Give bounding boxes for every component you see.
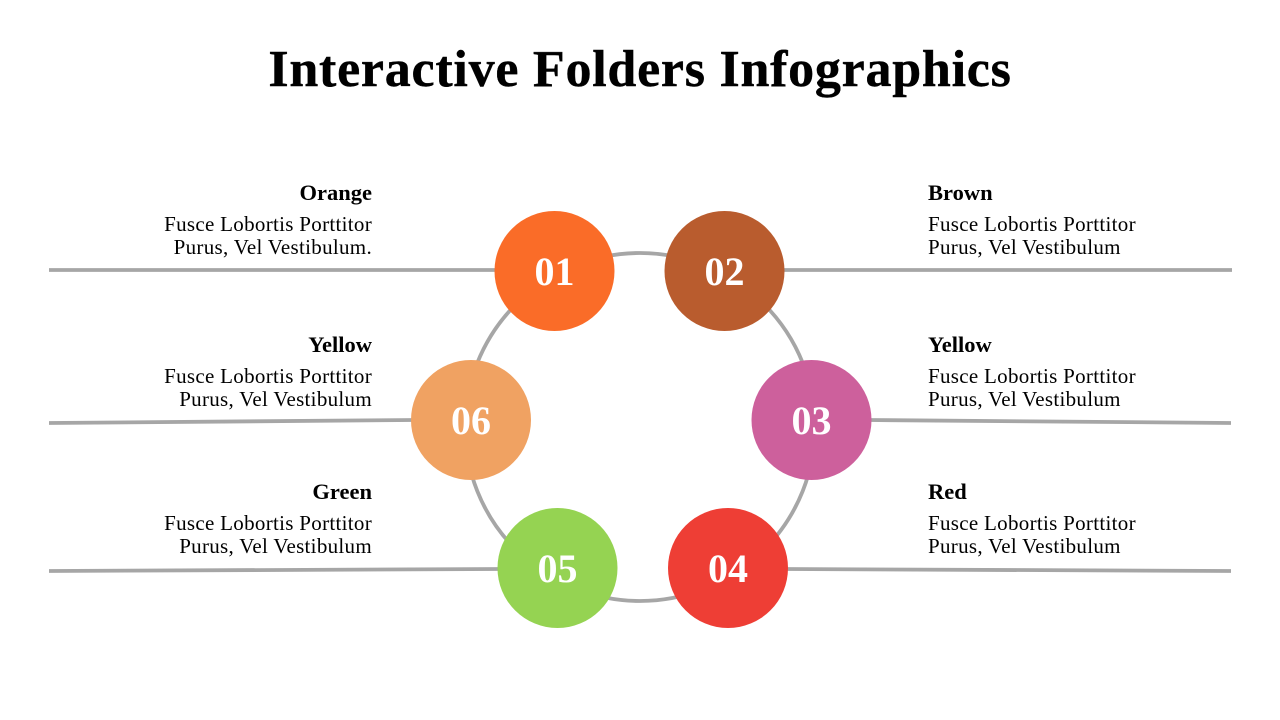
text block: Green: Purus, Vel Vestibulum [179,534,372,558]
text block: Yellow left: Fusce Lobortis Porttitor [164,364,372,388]
text block: Brown [928,180,1136,259]
central ring [465,253,815,601]
text block: Green: Fusce Lobortis Porttitor [164,511,372,535]
text block: Red: Red [928,478,967,504]
text block: Yellow right: Fusce Lobortis Porttitor [928,364,1136,388]
text block: Orange: Purus, Vel Vestibulum. [174,235,372,259]
text block: Red: Fusce Lobortis Porttitor [928,511,1136,535]
circle 03: 03 [792,398,832,443]
text block: Orange [164,180,372,259]
text block: Brown: Fusce Lobortis Porttitor [928,212,1136,236]
text block: Brown: Brown [928,180,993,204]
text block: Orange: Orange [300,180,372,204]
connector lines [49,270,1232,571]
text block: Red [928,478,1136,558]
text block: Yellow right [928,332,1136,411]
circle 01 [494,211,614,331]
circle 01: 01 [534,249,574,294]
circle 04 [668,508,788,628]
text block: Yellow left: Purus, Vel Vestibulum [179,387,372,411]
text block: Green: Green [312,478,372,504]
circle 06: 06 [451,398,491,443]
circle 02 [664,211,784,331]
circle 03 [752,360,872,480]
text block: Orange: Fusce Lobortis Porttitor [164,212,372,236]
circle 02: 02 [704,249,744,294]
circle 05: 05 [538,546,578,591]
circle 06 [411,360,531,480]
text block: Green [164,478,372,558]
circle 05 [498,508,618,628]
text block: Yellow left: Yellow [308,332,372,356]
text block: Yellow right: Yellow [928,332,992,356]
text block: Red: Purus, Vel Vestibulum [928,534,1121,558]
title: Interactive Folders Infographics [268,41,1012,98]
text block: Brown: Purus, Vel Vestibulum [928,235,1121,259]
text block: Yellow right: Purus, Vel Vestibulum [928,387,1121,411]
text block: Yellow left [164,332,372,411]
circle 04: 04 [708,546,748,591]
